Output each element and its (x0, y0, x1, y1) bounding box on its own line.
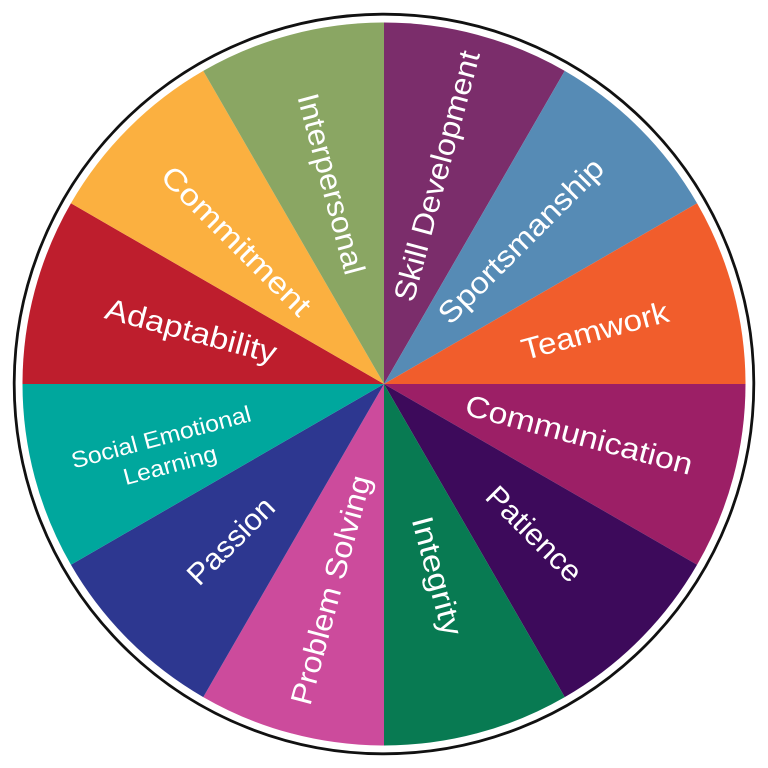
segment: Skill Development (384, 22, 565, 384)
segment: Integrity: Integrity (405, 513, 468, 639)
segment: Social Emotional Learning (22, 384, 384, 565)
segment: Commitment: Commitment (154, 160, 318, 324)
segment: Integrity (384, 384, 565, 746)
segment: Teamwork: Teamwork (518, 296, 673, 367)
segment: Passion (71, 384, 384, 697)
segment: Patience: Patience (479, 480, 588, 589)
segment: Teamwork (384, 203, 746, 384)
segment: Sportsmanship (384, 71, 697, 384)
segment: Adaptability: Adaptability (102, 293, 280, 370)
segment: Skill Development: Skill Development (388, 47, 487, 305)
segment: Patience (384, 384, 697, 697)
segment: Communication: Communication (462, 389, 696, 482)
segment: Problem Solving: Problem Solving (285, 472, 378, 708)
segment: Problem Solving (203, 384, 384, 746)
segment: Passion: Passion (181, 491, 282, 592)
segment: Social Emotional Learning: Learning (120, 440, 220, 490)
segment: Interpersonal (203, 22, 384, 384)
segment: Adaptability (22, 203, 384, 384)
segment: Interpersonal: Interpersonal (291, 90, 371, 278)
segment: Communication (384, 384, 746, 565)
segment: Social Emotional Learning: Social Emotional (68, 401, 254, 473)
segment: Sportsmanship: Sportsmanship (432, 152, 611, 331)
segment: Commitment (71, 71, 384, 384)
